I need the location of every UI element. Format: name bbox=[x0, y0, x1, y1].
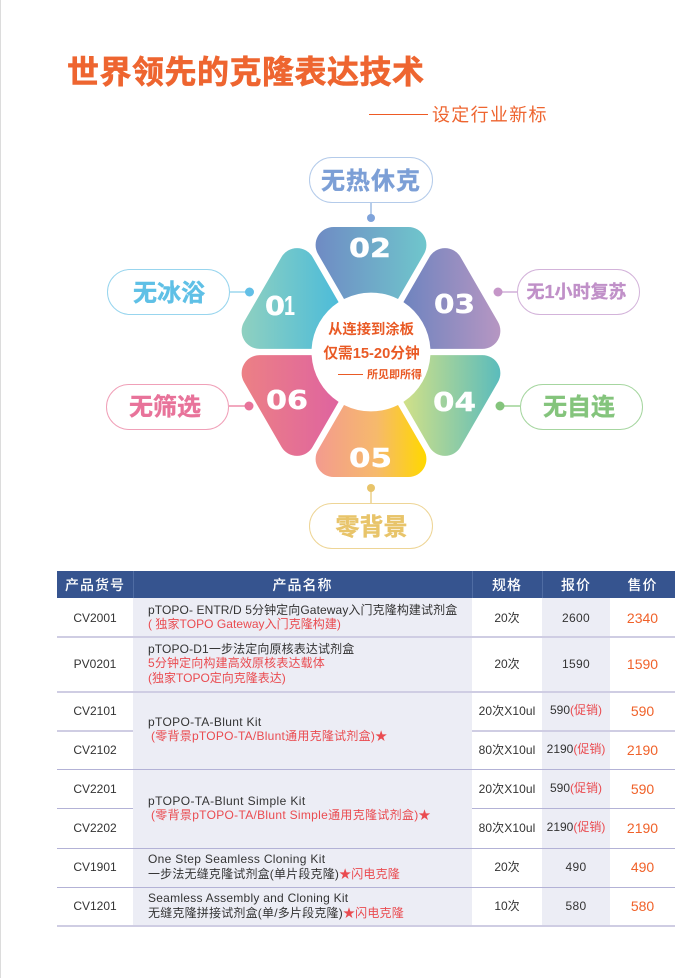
row CV2001: pTOPO- ENTR/D 5分钟定向Gateway入门克隆构建试剂盒 bbox=[148, 603, 457, 617]
row CV2201 / CV2202: 590(促销) bbox=[550, 781, 602, 795]
row PV0201: 5分钟定向构建高效原核表达载体 bbox=[148, 656, 325, 670]
petal 01 bbox=[235, 242, 353, 373]
petal 01: 1 bbox=[284, 290, 295, 321]
row CV2201 / CV2202: pTOPO-TA-Blunt Simple Kit bbox=[148, 794, 306, 808]
row PV0201: PV0201 bbox=[74, 657, 116, 671]
table header: 报价 bbox=[561, 577, 591, 593]
row CV2101 / CV2102: 590(促销) bbox=[550, 703, 602, 717]
row CV2101 / CV2102: 80次X10ul bbox=[479, 743, 535, 757]
row PV0201: 20次 bbox=[494, 657, 520, 671]
label: 零背景 bbox=[310, 484, 432, 548]
row CV1901: 20次 bbox=[494, 860, 520, 874]
row CV2101 / CV2102: 2190 bbox=[627, 742, 658, 758]
subtitle: 设定行业新标 bbox=[432, 105, 548, 125]
row CV2001: 2600 bbox=[562, 611, 590, 625]
row CV1201: Seamless Assembly and Cloning Kit bbox=[148, 891, 348, 905]
row CV1201: 580 bbox=[566, 899, 586, 913]
row CV2001: 20次 bbox=[494, 611, 520, 625]
row CV2001: 2340 bbox=[627, 610, 658, 626]
row CV1901: 490 bbox=[631, 859, 654, 875]
row PV0201: pTOPO-D1一步法定向原核表达试剂盒 bbox=[148, 642, 354, 656]
title: 世界领先的克隆表达技术 bbox=[67, 54, 425, 90]
row CV2201 / CV2202: 590 bbox=[631, 781, 654, 797]
row CV1901: 一步法无缝克隆试剂盒(单片段克隆)★闪电克隆 bbox=[148, 867, 400, 881]
table header: 售价 bbox=[628, 577, 658, 593]
row PV0201: (独家TOPO定向克隆表达) bbox=[148, 671, 286, 685]
row lines bbox=[57, 636, 675, 927]
petal 03: 03 bbox=[434, 290, 475, 320]
row CV1201 bbox=[73, 891, 654, 920]
table header: 规格 bbox=[492, 577, 522, 593]
row CV2201 / CV2202: 20次X10ul bbox=[479, 782, 535, 796]
row CV2201 / CV2202: 80次X10ul bbox=[479, 821, 535, 835]
row CV2001 bbox=[73, 603, 658, 631]
petal diagram bbox=[106, 157, 643, 549]
row CV1201: 10次 bbox=[494, 899, 520, 913]
table header bbox=[57, 571, 675, 598]
row PV0201 bbox=[74, 642, 658, 685]
petal 04 bbox=[389, 331, 507, 462]
table header: 产品货号 bbox=[65, 577, 125, 593]
row CV2101 / CV2102: pTOPO-TA-Blunt Kit bbox=[148, 715, 262, 729]
row CV2201 / CV2202: (零背景pTOPO-TA/Blunt Simple通用克隆试剂盒)★ bbox=[151, 808, 431, 822]
row CV2001: ( 独家TOPO Gateway入门克隆构建) bbox=[148, 617, 341, 631]
row CV2101 / CV2102: CV2101 bbox=[73, 704, 117, 718]
row CV1901: 490 bbox=[566, 860, 586, 874]
label: 无自连: 无自连 bbox=[543, 394, 615, 421]
petal 01: 0 bbox=[265, 292, 285, 322]
petal 06 bbox=[235, 331, 353, 462]
row CV2201 / CV2202 bbox=[73, 781, 658, 836]
label: 无1小时复苏: 无1小时复苏 bbox=[526, 282, 627, 302]
row PV0201: 1590 bbox=[562, 657, 590, 671]
row PV0201: 1590 bbox=[627, 656, 658, 672]
price column background bbox=[542, 598, 610, 926]
petal 05 bbox=[316, 405, 426, 477]
row CV2101 / CV2102 bbox=[73, 703, 658, 758]
petal 02: 02 bbox=[349, 234, 391, 264]
row CV2201 / CV2202: CV2202 bbox=[73, 821, 117, 835]
center message: 仅需15-20分钟 bbox=[323, 344, 420, 362]
product name column background bbox=[133, 598, 472, 926]
label: 无冰浴: 无冰浴 bbox=[133, 280, 205, 307]
label: 无筛选 bbox=[106, 384, 254, 430]
row CV2101 / CV2102: (零背景pTOPO-TA/Blunt通用克隆试剂盒)★ bbox=[151, 729, 387, 743]
center message: 从连接到涂板 bbox=[328, 320, 414, 338]
label: 无1小时复苏 bbox=[494, 270, 640, 314]
petal 06: 06 bbox=[266, 386, 308, 416]
row CV1901: CV1901 bbox=[73, 860, 117, 874]
product table bbox=[57, 571, 675, 927]
row CV1201: 无缝克隆拼接试剂盒(单/多片段克隆)★闪电克隆 bbox=[148, 906, 404, 920]
row CV2201 / CV2202: 2190(促销) bbox=[547, 820, 605, 834]
row CV2201 / CV2202: CV2201 bbox=[73, 782, 117, 796]
row CV1201: 580 bbox=[631, 898, 654, 914]
row CV1901: One Step Seamless Cloning Kit bbox=[148, 852, 325, 866]
row CV2001: CV2001 bbox=[73, 611, 117, 625]
label: 无自连 bbox=[496, 384, 642, 430]
table header: 产品名称 bbox=[272, 577, 332, 593]
center message: 所见即所得 bbox=[367, 367, 422, 381]
label: 无热休克: 无热休克 bbox=[321, 168, 421, 195]
petal 02 bbox=[316, 227, 426, 299]
row CV2101 / CV2102: 20次X10ul bbox=[479, 704, 535, 718]
label: 无热休克 bbox=[310, 158, 432, 222]
petal 05: 05 bbox=[349, 444, 392, 474]
row CV2201 / CV2202: 2190 bbox=[627, 820, 658, 836]
label: 无冰浴 bbox=[108, 270, 254, 314]
row CV1901 bbox=[73, 852, 654, 881]
center message bbox=[313, 294, 429, 410]
row CV2101 / CV2102: 2190(促销) bbox=[547, 742, 605, 756]
petal 03 bbox=[389, 242, 507, 373]
row CV2101 / CV2102: 590 bbox=[631, 703, 654, 719]
row CV1201: CV1201 bbox=[73, 899, 117, 913]
label: 无筛选: 无筛选 bbox=[129, 394, 201, 421]
row CV2101 / CV2102: CV2102 bbox=[73, 743, 117, 757]
label: 零背景: 零背景 bbox=[336, 514, 408, 541]
petal 04: 04 bbox=[433, 388, 476, 418]
